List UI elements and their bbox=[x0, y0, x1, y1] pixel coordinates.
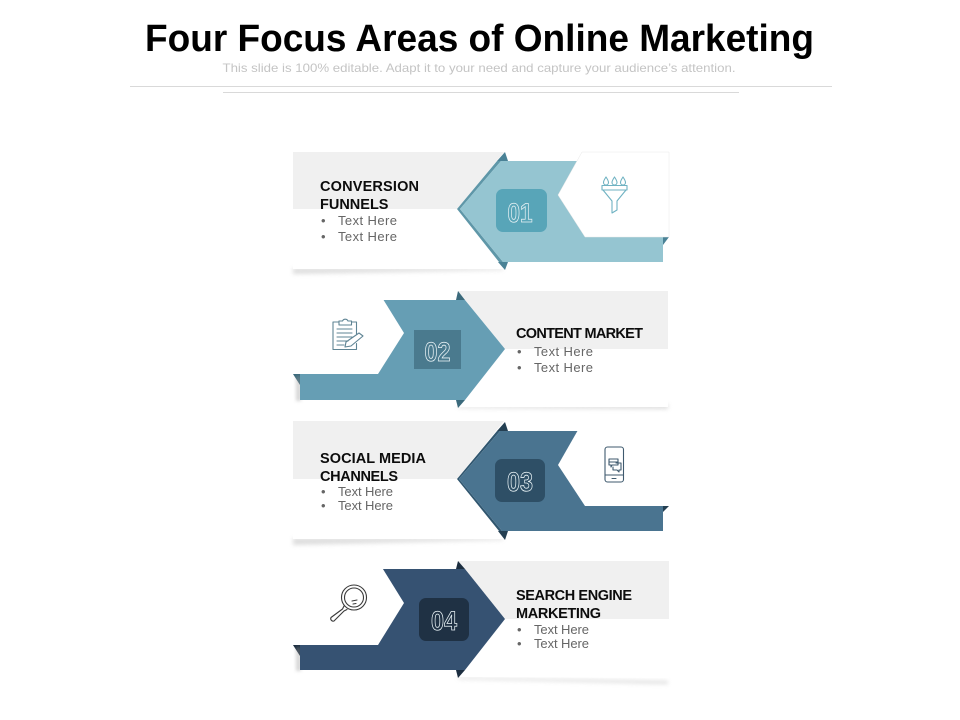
bullet list: Text Here bbox=[338, 498, 393, 513]
heading: social media channels bbox=[320, 451, 427, 485]
icon card bbox=[293, 561, 404, 645]
icon card bbox=[558, 423, 669, 506]
text card background bbox=[458, 561, 669, 678]
heading: search engine marketing: MARKETING bbox=[516, 606, 601, 622]
bullet list bbox=[321, 213, 397, 244]
bullet list: • bbox=[321, 229, 326, 244]
bullet list bbox=[517, 622, 589, 651]
icon: smartphone with chat bbox=[605, 447, 624, 482]
bullet list bbox=[321, 484, 393, 513]
bullet list: • bbox=[517, 344, 522, 359]
icon card bbox=[558, 152, 669, 237]
icon: clipboard with pencil bbox=[333, 319, 363, 350]
number badge 02: 02 bbox=[424, 337, 450, 367]
bullet list: • bbox=[321, 213, 326, 228]
number badge 04 bbox=[419, 598, 469, 641]
heading: conversion funnels: CONVERSION bbox=[320, 179, 419, 195]
icon: magnifying glass bbox=[331, 585, 366, 621]
heading: conversion funnels bbox=[320, 179, 419, 213]
arrow band bbox=[293, 291, 505, 408]
bullet list: Text Here bbox=[338, 484, 393, 499]
bullet list: Text Here bbox=[534, 344, 593, 359]
header divider lines bbox=[130, 86, 832, 92]
bullet list bbox=[517, 344, 593, 375]
number badge 01 bbox=[496, 189, 547, 232]
heading: social media channels: SOCIAL MEDIA bbox=[320, 451, 427, 467]
number badge 02 bbox=[414, 330, 461, 369]
panel: social media channels bbox=[293, 421, 669, 545]
arrow band bbox=[457, 422, 669, 540]
bullet list: Text Here bbox=[338, 229, 397, 244]
bullet list: • bbox=[517, 360, 522, 375]
heading: conversion funnels: FUNNELS bbox=[320, 197, 389, 213]
text card background bbox=[293, 152, 505, 269]
bullet list: Text Here bbox=[534, 636, 589, 651]
heading: content market: CONTENT MARKET bbox=[516, 326, 643, 342]
bullet list: • bbox=[517, 622, 522, 637]
number badge 01: 01 bbox=[508, 198, 532, 228]
number badge 04: 04 bbox=[431, 606, 457, 636]
panel: content market bbox=[293, 291, 668, 409]
bullet list: • bbox=[321, 498, 326, 513]
arrow band bbox=[293, 561, 505, 678]
number badge 03: 03 bbox=[507, 467, 533, 497]
heading: social media channels: CHANNELS bbox=[320, 469, 398, 485]
heading: search engine marketing bbox=[516, 588, 632, 622]
number badge 03 bbox=[495, 459, 545, 502]
text card background bbox=[458, 291, 668, 407]
panel: conversion funnels bbox=[293, 152, 669, 274]
heading: search engine marketing: SEARCH ENGINE bbox=[516, 588, 632, 604]
bullet list: Text Here bbox=[534, 622, 589, 637]
title: Four Focus Areas of Online Marketing bbox=[145, 18, 814, 60]
icon: funnel bbox=[602, 177, 627, 213]
arrow band bbox=[457, 152, 669, 270]
bullet list: • bbox=[321, 484, 326, 499]
subtitle: This slide is 100% editable. Adapt it to your need and capture your audience’s attention. bbox=[222, 61, 736, 75]
bullet list: • bbox=[517, 636, 522, 651]
icon card bbox=[293, 291, 404, 374]
text card background bbox=[293, 421, 505, 539]
panel: search engine marketing bbox=[293, 561, 669, 684]
bullet list: Text Here bbox=[534, 360, 593, 375]
bullet list: Text Here bbox=[338, 213, 397, 228]
